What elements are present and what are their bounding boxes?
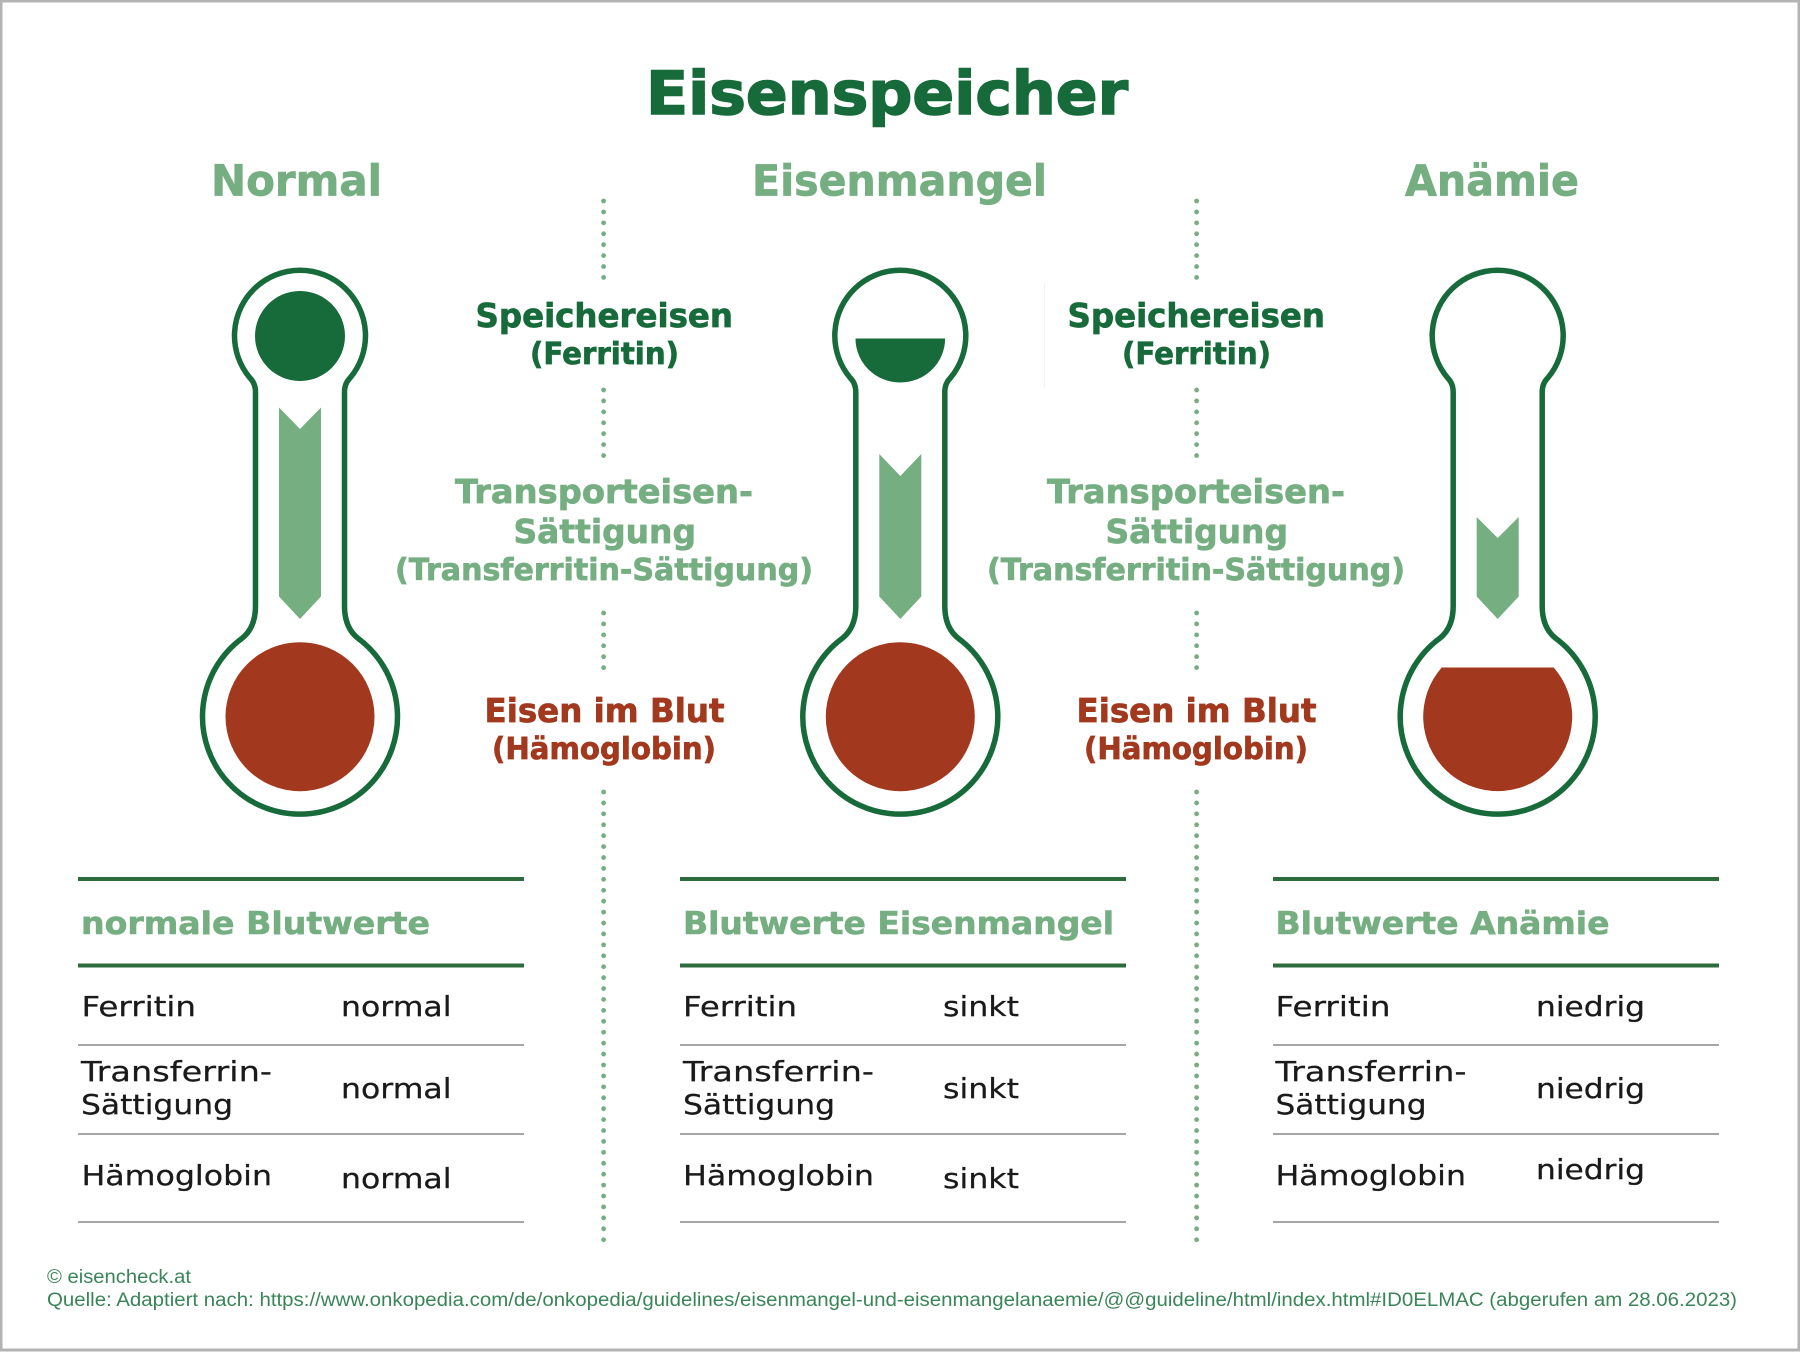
row: Hämoglobin: Hämoglobin — [1276, 1159, 1466, 1192]
label: Ferritin: (Ferritin) — [530, 337, 679, 372]
row: Ferritin: Ferritin — [683, 990, 797, 1023]
row continuation: Sättigung — [81, 1088, 233, 1121]
label: Transferritin-Sättigung: (Transferritin-Sättigung) — [395, 553, 813, 588]
column heading: Anämie: Anämie — [1405, 156, 1579, 206]
value: Hämoglobin: sinkt — [943, 1162, 1019, 1195]
value: Transferrin-Sättigung: normal — [341, 1072, 452, 1105]
table: Blutwerte Eisenmangel — [680, 879, 1126, 1222]
row: Hämoglobin: Hämoglobin — [683, 1159, 874, 1192]
value: Transferrin-Sättigung: sinkt — [943, 1072, 1019, 1105]
transport arrow — [879, 454, 921, 619]
row: Transferrin-Sättigung: Transferrin- — [1274, 1055, 1466, 1088]
row: Transferrin-Sättigung: Transferrin- — [682, 1055, 874, 1088]
row: Transferrin-Sättigung: Transferrin- — [80, 1055, 272, 1088]
label: Eisen im Blut: Eisen im Blut — [1076, 691, 1317, 730]
blood iron partial fill — [1423, 668, 1572, 791]
storage iron fill — [255, 291, 345, 381]
label: Transporteisen: Transporteisen- — [455, 472, 753, 511]
label: Sättigung: Sättigung — [514, 512, 696, 551]
column heading: Normal: Normal — [211, 156, 382, 206]
value: Hämoglobin: normal — [341, 1162, 452, 1195]
value: Ferritin: niedrig — [1536, 990, 1645, 1023]
label: Transporteisen: Transporteisen- — [1047, 472, 1345, 511]
row: Ferritin: Ferritin — [1276, 990, 1390, 1023]
table heading: Blutwerte Anämie — [1276, 906, 1610, 942]
footer: source: Quelle: Adaptiert nach: https://www.onkopedia.com/de/onkopedia/guidelines/eisenmangel-und-eisenmangelanaemie/@@guideline/html/index.html#ID0ELMAC (abgerufen am 28.06.2023) — [47, 1290, 1737, 1311]
dotted divider right — [1194, 201, 1199, 1243]
label: Speichereisen: Speichereisen — [476, 296, 733, 335]
column heading: Eisenmangel: Eisenmangel — [752, 156, 1047, 206]
outline — [803, 270, 998, 814]
value: Ferritin: sinkt — [943, 990, 1019, 1023]
center labels left — [395, 296, 813, 767]
footer: copyright: © eisencheck.at — [47, 1267, 192, 1288]
blood iron fill — [826, 642, 975, 791]
outline — [202, 270, 398, 814]
row: Ferritin: Ferritin — [82, 990, 196, 1023]
thermometer: Normal — [202, 270, 398, 814]
blood iron fill — [226, 642, 374, 791]
thermometer: Anämie — [1400, 270, 1595, 814]
label: Sättigung: Sättigung — [1106, 512, 1288, 551]
table heading: normale Blutwerte — [81, 906, 430, 942]
title: Eisenspeicher — [646, 59, 1128, 129]
label: Eisen im Blut: Eisen im Blut — [484, 691, 725, 730]
storage iron half fill — [856, 338, 945, 382]
label: Hämoglobin: (Hämoglobin) — [492, 732, 716, 767]
center labels right — [987, 296, 1405, 767]
value: Transferrin-Sättigung: niedrig — [1536, 1072, 1645, 1105]
table: Blutwerte Anämie — [1273, 879, 1719, 1222]
label: Hämoglobin: (Hämoglobin) — [1084, 732, 1308, 767]
transport arrow — [279, 408, 321, 619]
table heading: Blutwerte Eisenmangel — [683, 906, 1114, 942]
value: Ferritin: normal — [341, 990, 452, 1023]
row: Hämoglobin: Hämoglobin — [82, 1159, 272, 1192]
dotted divider left — [601, 201, 606, 1243]
thermometer: Eisenmangel — [803, 270, 998, 814]
row continuation: Sättigung — [1276, 1088, 1426, 1121]
label: Transferritin-Sättigung: (Transferritin-Sättigung) — [987, 553, 1405, 588]
outline — [1400, 270, 1595, 814]
transport arrow — [1477, 517, 1519, 619]
table: normale Blutwerte — [78, 879, 524, 1222]
row continuation: Sättigung — [683, 1088, 835, 1121]
value: Hämoglobin: niedrig — [1536, 1153, 1645, 1186]
label: Ferritin: (Ferritin) — [1122, 337, 1271, 372]
label: Speichereisen: Speichereisen — [1068, 296, 1325, 335]
